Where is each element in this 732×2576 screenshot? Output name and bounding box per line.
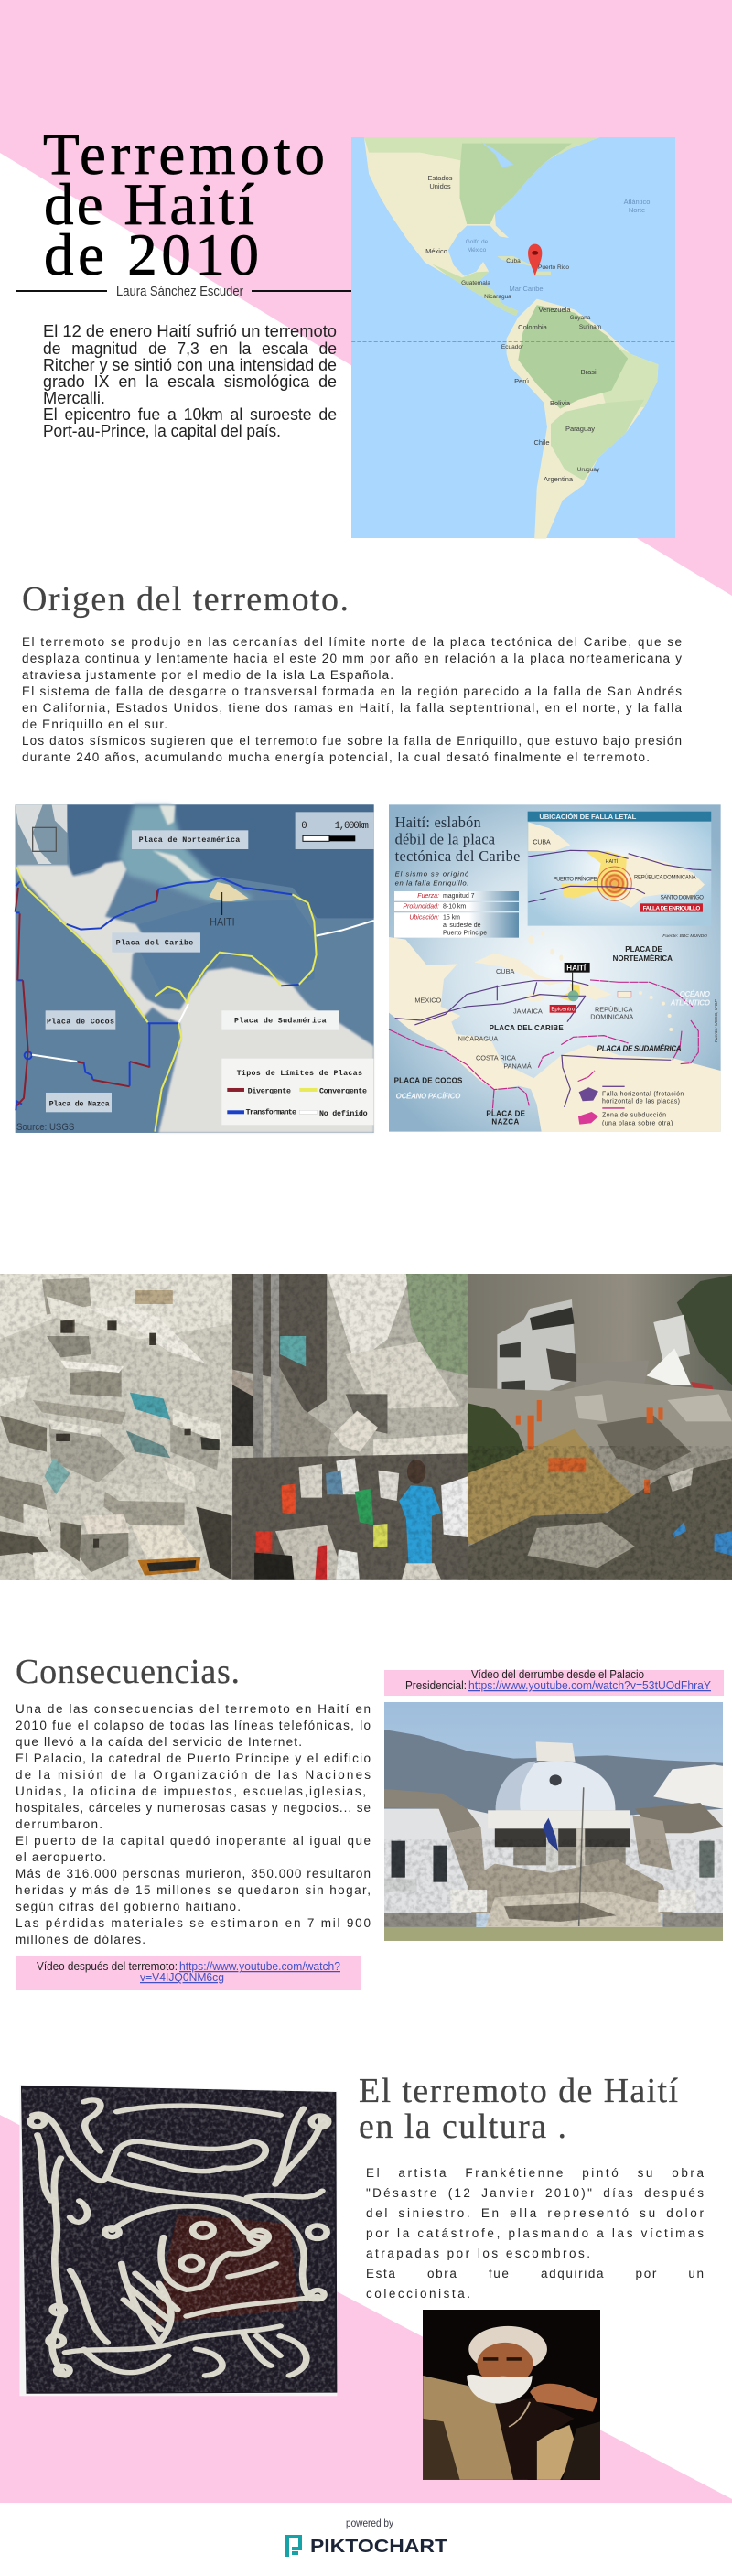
photo: portrait of Frankétienne <box>423 2310 600 2480</box>
infographic: place names <box>414 967 633 1070</box>
palace: rubble <box>467 1859 673 1913</box>
text block: cultura: "Désastre (12 Janvier 2010)" días después <box>366 2186 704 2200</box>
callout: video after the earthquake <box>16 1956 361 1990</box>
painting: red-brown ground <box>154 2214 299 2323</box>
text block: consecuencias: de la misión de la Organización de las Naciones <box>16 1768 371 1782</box>
palace: mountains <box>384 1730 723 1816</box>
map labels: Chile <box>533 438 550 447</box>
infographic: inset fault location map: SANTO DOMINGO <box>661 895 704 900</box>
infographic: ocean labels: OCÉANO <box>680 990 711 998</box>
infographic: inset fault location map: UBICACIÓN DE FALLA LETAL <box>539 813 637 821</box>
icon: red location pin <box>528 244 542 276</box>
map labels: México <box>425 247 447 255</box>
infographic: place names: DOMINICANA <box>590 1012 633 1020</box>
text block: origen: Los datos sísmicos sugieren que el terremoto fue sobre la falla de Enriquillo, que estuvo bajo presión <box>22 734 682 748</box>
photo: rescue teams in the rubble <box>468 1274 732 1580</box>
plate boundaries: transform blue <box>16 878 299 1110</box>
infographic: legend: horizontal de las placas) <box>602 1099 680 1105</box>
text block: origen: durante 240 años, acumulando mucha energía potencial, la cual desató finalmente el terremoto. <box>22 750 650 764</box>
scale bar <box>296 812 374 849</box>
text block: consecuencias: hospitales, cárceles y numerosas casas y negocios... se <box>16 1801 371 1815</box>
callout: video after the earthquake: Vídeo después del terremoto: <box>37 1960 178 1973</box>
infographic: subheading: en la falla Enriquillo. <box>395 878 468 887</box>
text block: cultura: del siniestro. En ella representó su dolor <box>366 2206 705 2220</box>
palace: flag <box>543 1818 558 1851</box>
palace: collapsed right roof <box>653 1764 724 1809</box>
text block: consecuencias: heridas y más de 15 millones se quedaron sin hogar, <box>16 1883 371 1897</box>
infographic: inset fault location map: HAITÍ <box>606 858 619 865</box>
map labels: Puerto Rico <box>538 264 569 271</box>
infographic: epicentre marker: Epicentro <box>551 1007 576 1012</box>
source note: Source: USGS <box>16 1122 75 1133</box>
text block: origen: El terremoto se produjo en las cercanías del límite norte de la placa tectónica del Caribe, que se <box>22 635 682 649</box>
text block: consecuencias: según cifras del gobierno haitiano. <box>16 1900 241 1913</box>
map land: eastern US green <box>460 144 572 224</box>
text block: consecuencias: 2010 fue el colapso de todas las líneas telefónicas, lo <box>16 1719 371 1732</box>
infographic: Haiti tag: HAITÍ <box>566 965 587 973</box>
map: tectonic plates <box>16 804 374 1133</box>
map labels: Colombia <box>518 323 548 331</box>
callout: video of the palace collapse: Vídeo del derrumbe desde el Palacio <box>471 1668 644 1681</box>
text block: cultura: El artista Frankétienne pintó su obra <box>366 2166 704 2180</box>
infographic: legend: Falla horizontal (frotación <box>602 1091 684 1097</box>
infographic: legend: (una placa sobre otra) <box>602 1120 673 1126</box>
plate map: Caribbean sea <box>128 900 318 995</box>
infographic: ocean labels: OCÉANO PACÍFICO <box>396 1093 461 1101</box>
text block: cultura: Esta obra fue adquirida por un <box>366 2267 704 2280</box>
heading: origen: Origen del terremoto. <box>22 580 349 619</box>
legend: plate boundary types <box>221 1059 373 1125</box>
intro text block: grado IX en la escala sismológica de <box>43 372 337 391</box>
scale bar: 1,000km <box>335 821 369 832</box>
map labels: Nicaragua <box>484 294 511 300</box>
text block: cultura <box>366 2166 705 2301</box>
label: South American plate: Placa de Sudamérica <box>234 1016 327 1025</box>
text block: cultura: coleccionista. <box>366 2287 470 2301</box>
label: Nazca plate: Placa de Nazca <box>49 1099 110 1108</box>
author byline with rules: Laura Sánchez Escuder <box>116 284 243 299</box>
text block: cultura: atrapadas por los escombros. <box>366 2247 590 2260</box>
text block: consecuencias: derrumbaron. <box>16 1817 102 1831</box>
text block: consecuencias: el aeropuerto. <box>16 1850 106 1864</box>
infographic: data table: al sudeste de <box>443 922 481 929</box>
infographic: purple fault lines <box>395 981 671 1107</box>
map labels: Paraguay <box>565 425 595 433</box>
infographic: inset fault location map: FALLA DE ENRIQUILLO <box>643 905 700 911</box>
infographic: data table: Fuerza: <box>417 893 439 900</box>
map labels: Brasil <box>581 368 598 376</box>
infographic: region labels <box>394 945 682 1126</box>
infographic: place names: NICARAGUA <box>458 1035 498 1043</box>
text block: consecuencias: que llevó a la caída del servicio de Internet. <box>16 1735 302 1749</box>
map land: North America <box>364 137 600 316</box>
infographic: inset fault location map: PUERTO PRÍNCIPE <box>554 876 597 882</box>
intro text block: Ritcher y se sintió con una intensidad de <box>43 356 337 374</box>
map feature: Great Lakes <box>481 142 513 167</box>
palace: left wing windows <box>392 1841 447 1882</box>
map labels: México <box>468 247 487 253</box>
painting: Désastre by Frankétienne <box>19 2085 337 2396</box>
heading: cultura: en la cultura . <box>359 2107 566 2146</box>
callout: video of the palace collapse: Presidencial: <box>405 1679 467 1692</box>
map land: Cuba <box>497 256 537 268</box>
photo: crowd in the street <box>232 1274 468 1580</box>
infographic: place names: PANAMÁ <box>503 1062 532 1070</box>
callout: video of the palace collapse <box>384 1668 724 1696</box>
infographic: ocean labels <box>396 990 711 1101</box>
palace: collapsed left roof <box>384 1789 481 1833</box>
text block: cultura: por la catástrofe, plasmando a las víctimas <box>366 2226 704 2240</box>
palace: plinths <box>450 1890 487 1912</box>
map: Americas with Haiti pin <box>351 137 675 539</box>
label: South American plate <box>221 1010 339 1030</box>
title <box>43 122 325 288</box>
text block: consecuencias: millones de dólares. <box>16 1933 145 1946</box>
callout: video after the earthquake: v=V4IJQ0NM6cg <box>140 1971 224 1984</box>
map labels <box>425 174 650 483</box>
painting: white figures <box>30 2100 328 2376</box>
portrait: eyes <box>483 2357 522 2361</box>
plate map: Atlantic deep water <box>67 804 374 918</box>
heading: consecuencias: Consecuencias. <box>16 1653 240 1691</box>
portrait: jacket <box>423 2376 528 2480</box>
infographic: data table: magnitud 7 <box>443 893 475 900</box>
map land: southern Mexico green <box>432 264 518 316</box>
portrait: hair <box>468 2326 547 2372</box>
intro text block <box>43 322 337 440</box>
infographic: data table <box>394 891 519 938</box>
infographic: inset fault location map: CUBA <box>533 839 551 846</box>
infographic: region labels: PLACA DE <box>486 1109 526 1117</box>
map labels: Argentina <box>544 475 574 483</box>
infographic: subheading <box>395 869 469 887</box>
infographic: Puerto Rico <box>618 991 631 997</box>
map land: south Brazil green <box>551 400 644 480</box>
infographic: inset fault location map: REPÚBLICA DOMINICANA <box>634 875 696 881</box>
label: Haiti marker: HAITI <box>210 916 235 929</box>
intro text block: El 12 de enero Haití sufrió un terremoto <box>43 322 337 340</box>
footer: powered by Piktochart <box>287 2517 447 2557</box>
plate map: inset globe <box>16 804 67 864</box>
infographic: place names: COSTA RICA <box>476 1054 516 1062</box>
portrait: glasses <box>509 2402 530 2427</box>
text block: consecuencias <box>16 1702 371 1946</box>
label: Cocos plate <box>46 1010 115 1030</box>
plate boundaries: convergent yellow <box>16 867 317 1132</box>
map labels: Bolivia <box>550 399 571 407</box>
map labels: Uruguay <box>577 467 600 473</box>
infographic: data table: Profundidad: <box>403 904 439 911</box>
infographic: Jamaica <box>526 993 544 1002</box>
label: Caribbean plate <box>112 932 200 953</box>
infographic: region labels: PLACA DE SUDAMÉRICA <box>597 1045 682 1053</box>
map: Caribbean plate infographic <box>389 804 721 1132</box>
map labels: Norte <box>629 206 645 214</box>
legend: plate boundary types: Convergente <box>319 1087 367 1096</box>
text block: consecuencias: El puerto de la capital quedó inoperante al igual que <box>16 1834 371 1848</box>
palace: flagpole <box>579 1787 584 1926</box>
text block: origen: desplaza continua y lentamente hacia el este 20 mm por año en relación a la placa norteamericana y <box>22 652 682 665</box>
palace: main building <box>384 1809 724 1913</box>
infographic: legend: Zona de subducción <box>602 1113 666 1119</box>
map labels: Venezuela <box>538 306 571 314</box>
infographic: region labels: PLACA DE <box>625 945 662 954</box>
map labels: Ecuador <box>501 344 524 350</box>
legend: plate boundary types: Divergente <box>248 1087 291 1096</box>
photo: collapsed hillside houses <box>0 1274 232 1580</box>
infographic: data table: Ubicación: <box>409 915 439 922</box>
palace: dome <box>496 1741 615 1810</box>
heading: cultura <box>359 2072 678 2146</box>
text block: origen: de Enriquillo en el sur. <box>22 717 167 731</box>
text block: origen: atraviesa justamente por el medio de la isla La Española. <box>22 668 393 682</box>
plate map: Cuba <box>153 850 210 881</box>
infographic: place names: REPÚBLICA <box>595 1005 633 1013</box>
infographic: region labels: NAZCA <box>491 1118 520 1126</box>
infographic: place names: JAMAICA <box>513 1007 543 1015</box>
text block: consecuencias: El Palacio, la catedral de Puerto Príncipe y el edificio <box>16 1751 371 1765</box>
map labels: Cuba <box>506 258 521 264</box>
infographic: epicentre marker <box>550 990 579 1013</box>
heading: cultura: El terremoto de Haití <box>359 2072 678 2110</box>
text block: consecuencias: Más de 316.000 personas murieron, 350.000 resultaron <box>16 1867 371 1881</box>
infographic: legend <box>578 1086 684 1126</box>
label: Nazca plate <box>46 1093 112 1112</box>
footer: powered by Piktochart: PIKTOCHART <box>310 2537 447 2557</box>
infographic: Haiti tag <box>565 963 590 991</box>
label: Cocos plate: Placa de Cocos <box>47 1018 114 1027</box>
text block: consecuencias: Una de las consecuencias del terremoto en Haití en <box>16 1702 371 1716</box>
text block: consecuencias: Las pérdidas materiales se estimaron en 7 mil 900 <box>16 1916 371 1930</box>
background: bottom pink diagonal <box>0 2115 732 2503</box>
title: de 2010 <box>44 222 259 288</box>
infographic: inset fault location map <box>528 812 711 926</box>
plate map: land mass Central and South America <box>16 861 374 1133</box>
infographic: place names: CUBA <box>496 967 514 975</box>
text block: consecuencias: Unidas, la oficina de impuestos, escuelas,iglesias, <box>16 1784 366 1798</box>
footer: powered by Piktochart: powered by <box>346 2517 393 2529</box>
portrait: hand <box>530 2384 597 2412</box>
plate map: shallow Caribbean teal <box>119 805 253 903</box>
infographic: subheading: El sismo se originó <box>395 869 469 878</box>
palace: portico <box>488 1810 630 1828</box>
map labels: Perú <box>514 377 529 385</box>
map labels: Surinam <box>579 324 601 330</box>
map land: South America <box>507 299 658 539</box>
intro text block: El epicentro fue a 10km al suroeste de <box>43 405 337 424</box>
infographic: main heading <box>395 814 520 865</box>
text block: origen: en California, Estados Unidos, tiene dos ramas en Haití, la falla septentrional, en el norte, y la falla <box>22 701 682 715</box>
map labels: Unidos <box>429 182 451 190</box>
infographic: place names: MÉXICO <box>414 997 442 1005</box>
map labels: Estados <box>427 174 453 182</box>
map labels: Guyana <box>570 315 591 321</box>
infographic: region labels: PLACA DE COCOS <box>394 1076 463 1084</box>
label: North American plate <box>132 830 248 849</box>
infographic: data table: 15 km <box>443 915 460 922</box>
infographic: Cuba <box>474 954 565 986</box>
infographic: ocean labels: ATLÁNTICO <box>670 998 711 1007</box>
photo: collapsed presidential palace <box>384 1702 724 1941</box>
label: Caribbean plate: Placa del Caribe <box>116 939 193 948</box>
plate map: Florida <box>159 805 176 825</box>
infographic: region labels: PLACA DEL CARIBE <box>490 1024 564 1032</box>
infographic: magenta subduction lines <box>389 980 698 1110</box>
label: Haiti marker <box>210 892 235 929</box>
plate boundaries: divergent red <box>16 888 157 1105</box>
map feature: equator <box>351 340 675 342</box>
infographic: data table: Puerto Príncipe <box>443 930 487 936</box>
intro text block: Mercalli. <box>43 389 105 407</box>
icon: Piktochart logo <box>287 2537 300 2557</box>
title: de Haití <box>44 172 254 238</box>
label: North American plate: Placa de Norteamérica <box>139 835 240 845</box>
infographic: Mexico and Central America land <box>389 937 721 1132</box>
infographic: main heading: Haití: eslabón <box>395 814 481 831</box>
infographic: source note: Fuente: BBC MUNDO <box>662 933 707 939</box>
palace: stairs <box>384 1913 476 1928</box>
map labels: Guatemala <box>461 280 490 286</box>
plate map: Hispaniola <box>209 882 249 901</box>
map labels: Mar Caribe <box>509 285 544 293</box>
map land: Hispaniola <box>533 272 551 275</box>
plate boundaries: undefined white <box>32 921 374 1062</box>
callout: video after the earthquake: https://www.youtube.com/watch? <box>179 1960 340 1973</box>
callout: video of the palace collapse: https://www.youtube.com/watch?v=53tUOdFhraY <box>468 1679 712 1692</box>
portrait: beard <box>467 2375 533 2404</box>
map land: northeast Brazil pale green <box>597 336 658 409</box>
legend: plate boundary types: No definido <box>319 1109 368 1118</box>
map land: Amazon green <box>518 305 628 409</box>
infographic: vertical credit: Fuente: USGS, IPGP <box>714 999 719 1042</box>
infographic: Hispaniola <box>567 982 611 1000</box>
text block: origen: El sistema de falla de desgarre o transversal formada en la región parecido a la falla de San Andrés <box>22 684 682 698</box>
infographic: Atlantic islands <box>528 931 673 1031</box>
intro text block: de magnitud de 7,3 en la escala de <box>43 340 337 358</box>
infographic: main heading: débil de la placa <box>395 830 496 847</box>
infographic: main heading: tectónica del Caribe <box>395 847 520 865</box>
intro text block: Port-au-Prince, la capital del país. <box>43 422 281 440</box>
infographic: data table: 8-10 km <box>443 904 466 911</box>
map labels: Golfo de <box>466 239 489 245</box>
legend: plate boundary types: Transformante <box>246 1108 296 1117</box>
palace: lawn <box>384 1927 724 1941</box>
background: top pink diagonal <box>0 0 732 596</box>
scale bar: 0 <box>301 821 307 832</box>
text block: origen <box>22 635 682 764</box>
portrait: face <box>477 2343 533 2377</box>
map labels: Atlántico <box>624 198 650 206</box>
infographic: region labels: NORTEAMÉRICA <box>613 954 673 963</box>
legend: plate boundary types: Tipos de Límites de Placas <box>237 1069 362 1078</box>
title: Terremoto <box>43 122 325 188</box>
map land: northern green belt <box>364 137 600 162</box>
